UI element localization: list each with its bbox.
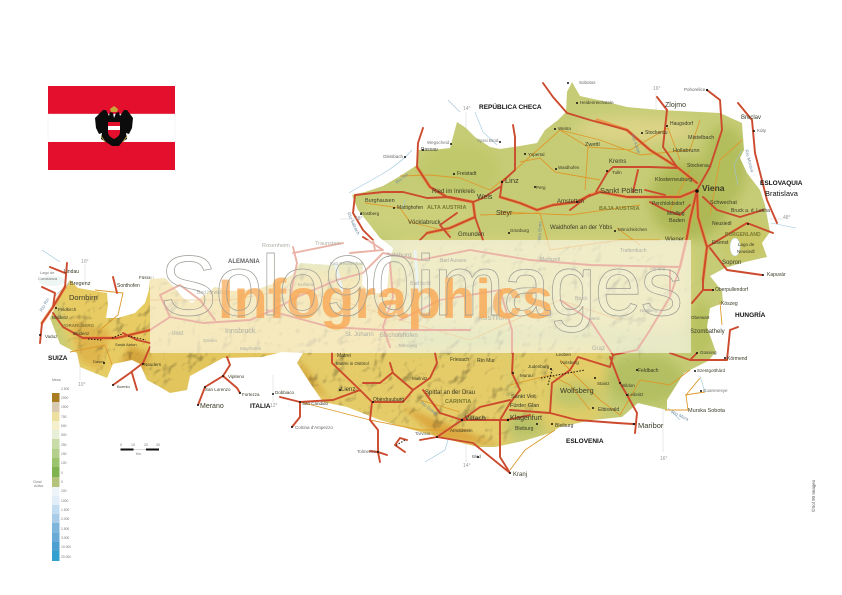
- place labels: east of Austria: Tulln: [612, 170, 622, 175]
- place labels: east of Austria: Baden: [669, 218, 685, 224]
- place labels: east of Austria: Judenburg: [528, 364, 550, 369]
- place labels: north and west of Austria: ALTA AUSTRIA: [427, 205, 466, 211]
- place labels: north and west of Austria: Sankt Anton: [115, 342, 137, 347]
- place labels: north and west of Austria: Waidhofen: [558, 165, 580, 170]
- labels inside watermark band: Kufstein: [298, 282, 315, 287]
- river labels: Río Kamp: [630, 134, 642, 155]
- labels inside watermark band: AUSTRIA: [478, 315, 507, 322]
- labels inside watermark band: Bischofshofen: [380, 333, 418, 339]
- place labels: east of Austria: [336, 87, 786, 433]
- place labels: east of Austria: Kószeg: [721, 301, 738, 307]
- place labels: north and west of Austria: Füssen: [139, 275, 154, 280]
- place labels: north and west of Austria: Fortezza: [242, 392, 260, 397]
- place labels: north and west of Austria: Davos: [93, 359, 104, 364]
- legend values: 100: [61, 461, 67, 465]
- place labels: north and west of Austria: Linz: [505, 176, 519, 185]
- legend values: 1000: [61, 499, 69, 503]
- place labels: north and west of Austria: Feldkirch: [58, 307, 77, 312]
- place labels: north and west of Austria: Ried im Innkreis: [432, 189, 475, 195]
- place labels: east of Austria: Fürder Glan: [510, 403, 539, 409]
- place labels: east of Austria: Oberwart: [691, 315, 710, 320]
- place labels: north and west of Austria: Vipiteno: [228, 374, 245, 379]
- secondary roads: [70, 120, 742, 470]
- legend values: 2.500: [61, 387, 69, 391]
- place labels: east of Austria: Klosterneuburg: [655, 177, 692, 183]
- place labels: north and west of Austria: Bludenz: [52, 315, 69, 320]
- graticule: meridians and parallels: [80, 92, 783, 462]
- place labels: east of Austria: Kapuvár: [767, 272, 786, 278]
- place labels: east of Austria: Matrei: [337, 353, 351, 359]
- place labels: north and west of Austria: Merano: [200, 403, 224, 410]
- labels inside watermark band: Aspang: [650, 266, 666, 271]
- legend values: 1500: [61, 405, 69, 409]
- country labels: Bratislava: [765, 189, 799, 198]
- labels inside watermark band: St. Johann: [345, 332, 374, 338]
- legend values: 2.500: [61, 527, 69, 531]
- city markers: [39, 82, 764, 474]
- place labels: east of Austria: Bleiburg: [555, 423, 574, 429]
- labels inside watermark band: Weiz: [590, 316, 601, 321]
- place labels: east of Austria: Neusiedl: [737, 249, 755, 254]
- legend values: 2000: [61, 396, 69, 400]
- place labels: north and west of Austria: [38, 80, 614, 478]
- place labels: north and west of Austria: Passau: [421, 147, 438, 153]
- place labels: east of Austria: Viena: [702, 183, 725, 193]
- place labels: east of Austria: Sankt Pölten: [600, 186, 643, 195]
- place labels: east of Austria: CARINTIA: [445, 399, 471, 405]
- river labels: [39, 134, 755, 422]
- place labels: east of Austria: Krems: [609, 159, 626, 165]
- elevation legend: [33, 378, 71, 561]
- place labels: east of Austria: Guarenesye: [703, 388, 728, 393]
- place labels: east of Austria: Pohorelice: [684, 87, 706, 92]
- labels inside watermark band: Bad Ischl: [410, 281, 431, 287]
- place labels: east of Austria: Wildon: [621, 383, 635, 388]
- place labels: east of Austria: Matrei in Osttirol: [336, 361, 369, 366]
- place labels: east of Austria: Sankt Veit: [511, 394, 536, 400]
- river labels: Río Salzach: [346, 211, 361, 236]
- place labels: north and west of Austria: Mattighofen: [397, 205, 423, 211]
- place labels: east of Austria: Neusiedl: [712, 221, 731, 227]
- place labels: north and west of Austria: Vaduz: [45, 334, 58, 339]
- motorways and main roads: [40, 83, 777, 473]
- river labels: Río Rin: [39, 297, 51, 312]
- place labels: east of Austria: Amstetten: [557, 199, 584, 205]
- place labels: east of Austria: Waidhofen an der Ybbs: [550, 225, 612, 231]
- river labels: Río Enns: [537, 221, 543, 240]
- graticule degree labels: 14°: [463, 463, 471, 469]
- labels inside watermark band: Hartberg: [640, 308, 658, 313]
- legend values: 150: [61, 452, 67, 456]
- graticule degree labels: 16°: [653, 86, 661, 92]
- place labels: north and west of Austria: Constanza: [38, 276, 58, 281]
- country labels: ESLOVAQUIA: [760, 180, 803, 187]
- place labels: east of Austria: Zlojmo: [665, 102, 686, 109]
- graticule degree labels: 14°: [463, 106, 471, 112]
- place labels: east of Austria: Bruck a. d. Leitha: [731, 208, 770, 214]
- river labels: Río Drava: [419, 400, 439, 417]
- country labels: ALEMANIA: [228, 259, 260, 265]
- place labels: east of Austria: Sopron: [722, 260, 741, 266]
- scale bar: 10: [131, 443, 135, 447]
- place labels: east of Austria: Mödling: [667, 211, 685, 217]
- place labels: east of Austria: Bleiburg: [515, 426, 534, 432]
- legend values: 0: [61, 471, 63, 475]
- legend values: 500: [61, 433, 67, 437]
- place labels: north and west of Austria: Gmunden: [458, 232, 484, 238]
- place labels: east of Austria: BURGENLAND: [725, 232, 761, 238]
- place labels: north and west of Austria: Tolmezzo: [357, 449, 377, 454]
- labels inside watermark band: Graz: [592, 346, 605, 352]
- place labels: north and west of Austria: Vyssi Brod: [477, 138, 499, 143]
- place labels: north and west of Austria: Sobotos: [579, 80, 596, 85]
- labels inside watermark band: Mariazell: [540, 257, 560, 263]
- labels inside watermark band: Bad Reichenhall: [330, 261, 363, 266]
- legend colour bar: [52, 393, 60, 561]
- motorway tunnels: [88, 334, 585, 446]
- place labels: north and west of Austria: Dornbirn: [69, 293, 98, 302]
- place labels: east of Austria: Voitsberg: [560, 360, 579, 365]
- place labels: east of Austria: Szentgotthárd: [697, 368, 726, 373]
- legend values: 10.000: [61, 545, 71, 549]
- graticule degree labels: 48°: [355, 216, 363, 222]
- scale bar: Km: [136, 452, 141, 456]
- place labels: north and west of Austria: VORARLBERG: [62, 323, 95, 328]
- place labels: east of Austria: Maribor: [638, 421, 664, 430]
- scale bar: 0: [120, 443, 122, 447]
- place labels: north and west of Austria: Lindau: [64, 269, 79, 275]
- watermark: outlined wordmark: Solo90images: [160, 239, 683, 334]
- place labels: north and west of Austria: Vöcklabruck: [408, 220, 442, 226]
- place labels: east of Austria: Mallnitz: [412, 376, 428, 381]
- place labels: east of Austria: Feldbach: [638, 368, 659, 374]
- place labels: north and west of Austria: San Lorenzo: [205, 387, 231, 392]
- labels inside watermark band: Bad Aussee: [440, 258, 467, 264]
- graticule degree labels: 10°: [81, 259, 89, 265]
- place labels: north and west of Austria: Perg: [536, 185, 546, 190]
- labels inside watermark band: Innsbruck: [225, 328, 256, 335]
- legend values: [33, 387, 71, 559]
- graticule degree labels: [78, 86, 791, 469]
- place labels: north and west of Austria: Bormio: [117, 384, 130, 389]
- labels inside watermark band: Salzburg: [386, 252, 412, 259]
- place labels: east of Austria: Leibnitz: [628, 392, 644, 397]
- legend values: 600: [61, 424, 67, 428]
- icon: coat of arms eagle: [95, 106, 133, 146]
- place labels: north and west of Austria: Steyr: [496, 210, 513, 217]
- legend title: Mesa: [52, 378, 61, 382]
- place labels: north and west of Austria: Dobbiaco: [275, 390, 295, 395]
- place labels: east of Austria: Eisenst: [712, 240, 729, 246]
- place labels: east of Austria: Friesach: [450, 357, 469, 363]
- legend values: 250: [61, 443, 67, 447]
- graticule degree labels: 48°: [783, 215, 791, 221]
- place labels: east of Austria: Stainz: [597, 381, 610, 386]
- flag of Austria: [48, 86, 175, 170]
- place labels: east of Austria: Lago de: [738, 242, 755, 247]
- place labels: east of Austria: BAJA AUSTRIA: [599, 206, 640, 212]
- pale watermark band: [150, 240, 691, 353]
- legend values: 0: [61, 480, 63, 484]
- place labels: east of Austria: Murau: [520, 373, 533, 378]
- labels inside watermark band: Rosenheim: [262, 243, 290, 249]
- labels inside watermark band: Tamsweg: [398, 343, 418, 348]
- legend values: 3.000: [61, 536, 69, 540]
- place labels: north and west of Austria: Yspertal: [528, 152, 545, 157]
- place labels: east of Austria: Oberdrauburg: [373, 397, 404, 403]
- place labels: east of Austria: Murska Sobota: [688, 408, 726, 414]
- place labels: east of Austria: Klagenfurt: [510, 415, 542, 422]
- country labels: REPÚBLICA CHECA: [479, 102, 542, 111]
- labels inside watermark band: Trattenbach: [620, 248, 647, 254]
- labels inside watermark band: [172, 241, 666, 352]
- country labels: ITALIA: [250, 403, 271, 410]
- watermark: orange wordmark: Infographics: [218, 267, 553, 330]
- place labels: east of Austria: Mönichkirchen: [618, 227, 648, 232]
- place labels: north and west of Austria: Bludenz: [73, 331, 90, 336]
- place labels: east of Austria: Haugsdorf: [670, 121, 694, 127]
- river labels: Río Mura: [671, 409, 690, 422]
- place labels: east of Austria: Körmend: [727, 356, 748, 362]
- labels inside watermark band: Traunstein: [315, 241, 341, 247]
- place labels: north and west of Austria: Lago de: [40, 270, 55, 275]
- place labels: north and west of Austria: Nauders: [144, 362, 162, 367]
- place labels: east of Austria: Perchtoldsdorf: [652, 201, 685, 207]
- place labels: north and west of Austria: Gleisbach: [383, 154, 404, 159]
- place labels: north and west of Austria: Trostberg: [360, 211, 380, 216]
- place labels: north and west of Austria: San Candido: [302, 401, 329, 406]
- scale bar: 30: [156, 443, 160, 447]
- place labels: east of Austria: Villach: [465, 415, 486, 422]
- place labels: north and west of Austria: Bled: [472, 454, 482, 459]
- place labels: north and west of Austria: Burghausen: [365, 198, 395, 204]
- place labels: east of Austria: Lienz: [341, 387, 355, 393]
- place labels: north and west of Austria: Heidenreichstein: [580, 100, 614, 105]
- labels inside watermark band: Sölden: [203, 338, 218, 343]
- place labels: east of Austria: Wiener: [665, 237, 684, 243]
- river labels: Río Morava: [744, 149, 755, 173]
- graticule degree labels: 16°: [660, 456, 668, 462]
- labels inside watermark band: Bruck: [575, 296, 588, 302]
- place labels: east of Austria: Arnoldstein: [450, 428, 473, 433]
- place labels: east of Austria: Kúty: [757, 128, 767, 133]
- scale bar: [120, 443, 160, 456]
- rivers and lakes: [39, 100, 796, 462]
- country labels: ESLOVENIA: [566, 438, 604, 445]
- place labels: north and west of Austria: Bregenz: [70, 281, 91, 287]
- place labels: east of Austria: Oberpullendorf: [715, 287, 749, 293]
- legend values: 200: [61, 489, 67, 493]
- place labels: north and west of Austria: Tarvisio: [415, 431, 431, 436]
- place labels: east of Austria: Río Mur: [477, 358, 495, 364]
- country labels: HUNGRÍA: [735, 310, 766, 319]
- legend values: 20.000: [61, 555, 71, 559]
- map: Austria terrain: [50, 82, 770, 447]
- place labels: east of Austria: Eibiswald: [598, 407, 619, 413]
- place labels: east of Austria: Stockerau: [687, 163, 710, 169]
- place labels: east of Austria: Stockerau: [645, 130, 668, 136]
- legend values: Activa: [34, 484, 43, 488]
- place labels: north and west of Austria: Wels: [477, 194, 493, 201]
- place labels: north and west of Austria: Sonthofen: [117, 283, 140, 289]
- place labels: east of Austria: Szombathely: [690, 329, 725, 335]
- legend values: Cimal: [33, 480, 42, 484]
- place labels: east of Austria: Leoben: [556, 352, 572, 357]
- labels inside watermark band: Imst: [172, 331, 184, 337]
- place labels: north and west of Austria: Cortina d'Ampezzo: [295, 425, 333, 430]
- place labels: north and west of Austria: Weitra: [558, 126, 571, 131]
- legend values: 750: [61, 415, 67, 419]
- place labels: north and west of Austria: Wegscheid: [427, 140, 450, 145]
- place labels: east of Austria: Mistelbach: [688, 135, 714, 141]
- place labels: east of Austria: Wolfsberg: [560, 386, 594, 395]
- graticule degree labels: 12°: [270, 403, 278, 409]
- place labels: north and west of Austria: Grünburg: [510, 228, 530, 233]
- labels inside watermark band: Mayrhofen: [240, 346, 262, 351]
- legend values: 2.000: [61, 517, 69, 521]
- place labels: east of Austria: Schwechat: [710, 200, 737, 206]
- country labels: [48, 102, 803, 445]
- place labels: east of Austria: Zwettl: [585, 142, 600, 148]
- river labels: Río Inn: [395, 172, 409, 185]
- place labels: north and west of Austria: Kranj: [513, 472, 527, 478]
- labels inside watermark band: Bad Hindelang: [197, 290, 230, 296]
- credit: ©Sol 90 Images: [810, 479, 816, 512]
- place labels: east of Austria: Spittal an der Drau: [425, 390, 475, 396]
- place labels: east of Austria: Güssing: [700, 350, 717, 355]
- country labels: SUIZA: [48, 355, 68, 362]
- place labels: east of Austria: Breclav: [741, 115, 761, 121]
- place labels: north and west of Austria: Freistadt: [457, 171, 477, 177]
- scale bar: 20: [144, 443, 148, 447]
- graticule degree labels: 10°: [78, 382, 86, 388]
- place labels: east of Austria: Hollabrunn: [673, 148, 700, 154]
- legend values: 1.500: [61, 508, 69, 512]
